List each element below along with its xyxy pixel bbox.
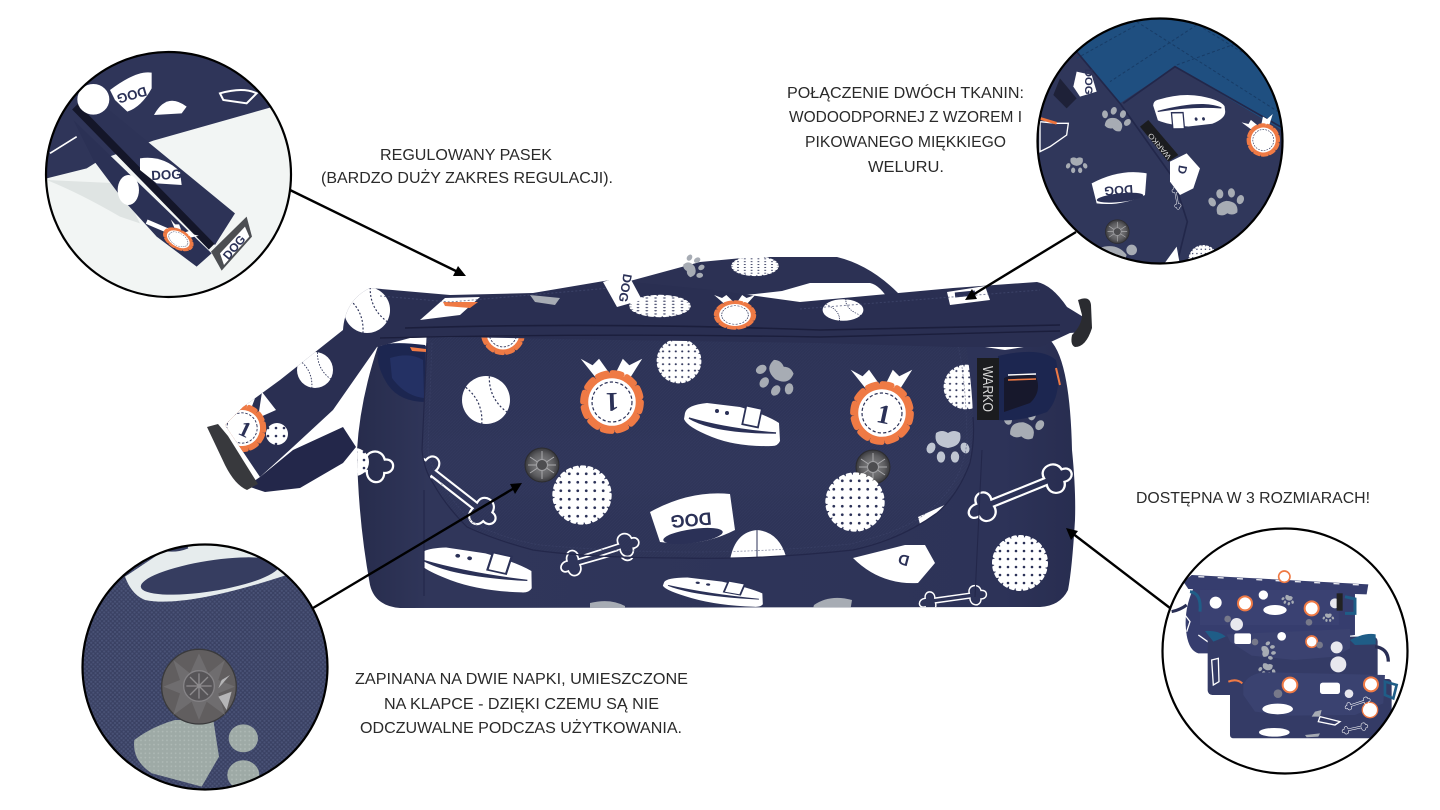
- circle detail: strap: DOG: [115, 84, 149, 106]
- arrow: two fabrics: [965, 232, 1076, 300]
- dog bowl: [650, 493, 735, 547]
- caption: fabrics: PIKOWANEGO MIĘKKIEGO: [805, 134, 1006, 151]
- main shoulder strap: [212, 280, 1085, 477]
- caption: snaps: [355, 671, 688, 737]
- flap outline: [422, 343, 974, 558]
- arrow: snaps: [313, 483, 522, 608]
- strap stitch: [380, 288, 1040, 309]
- circle outline: [82, 544, 328, 790]
- caption: strap: (BARDZO DUŻY ZAKRES REGULACJI).: [321, 169, 613, 187]
- caption: fabrics: WELURU.: [868, 159, 944, 176]
- caption: fabrics: WODOODPORNEJ Z WZOREM I: [789, 109, 1022, 126]
- roll top print right: [985, 336, 1030, 350]
- strap print: [212, 286, 1060, 455]
- dog bowl: DOG: [670, 508, 712, 532]
- flap print: 1: [874, 398, 894, 430]
- circle outline: [46, 52, 291, 297]
- flap stitching: [428, 343, 967, 552]
- small label: WARKO: [1146, 131, 1173, 161]
- medium bag: [1205, 629, 1388, 695]
- circle detail: strap: DOG: [220, 232, 248, 262]
- small dog bowl: [1092, 172, 1147, 204]
- caption: snaps: ZAPINANA NA DWIE NAPKI, UMIESZCZONE: [355, 671, 688, 688]
- circle detail: snap button: [75, 540, 335, 793]
- roll body: [357, 342, 1076, 608]
- circle detail: strap: [40, 50, 291, 297]
- lower front seams: [424, 450, 982, 597]
- strap handle loop: [615, 257, 898, 310]
- caption: fabrics: [787, 85, 1024, 176]
- arrow: adjustable strap: [290, 190, 466, 276]
- handle print: [679, 250, 778, 284]
- left strap buckle: [207, 424, 258, 490]
- caption: fabrics: POŁĄCZENIE DWÓCH TKANIN:: [787, 85, 1024, 102]
- caption: snaps: ODCZUWALNE PODCZAS UŻYTKOWANIA.: [360, 719, 682, 737]
- strap print: 1: [235, 416, 255, 443]
- product photo: rolled dog blanket with strap: [207, 250, 1092, 613]
- left roll end: [377, 343, 426, 402]
- circle detail: three sizes: [1162, 528, 1408, 774]
- right strap buckle: [1071, 298, 1092, 347]
- rear lower strap loop: [247, 427, 356, 492]
- caption: strap: [321, 147, 613, 187]
- caption: sizes: DOSTĘPNA W 3 ROZMIARACH!: [1136, 490, 1370, 507]
- circle detail: strap: DOG: [151, 167, 182, 183]
- small label: [1140, 120, 1178, 162]
- woven label: WARKO: [979, 366, 996, 412]
- roll body print: [357, 416, 1073, 608]
- large bag: [1172, 571, 1368, 653]
- strap DOG tag: DOG: [616, 273, 634, 303]
- circle detail: two fabrics: DOG: [1082, 69, 1094, 95]
- roll body print: D: [896, 550, 911, 569]
- small bag: [1228, 672, 1397, 738]
- circle outline: [1162, 528, 1408, 774]
- arrow: sizes: [1066, 528, 1170, 608]
- circle outline: [1038, 18, 1282, 264]
- small dog bowl: DOG: [1104, 182, 1133, 198]
- woven label: [977, 358, 999, 420]
- flap with print: [424, 337, 973, 558]
- strap DOG tag: [603, 273, 642, 307]
- flap print: 1: [605, 387, 620, 417]
- circle detail: two fabrics: D: [1175, 164, 1190, 175]
- flap print: [424, 338, 973, 558]
- right roll end: [998, 352, 1060, 420]
- caption: snaps: NA KLAPCE - DZIĘKI CZEMU SĄ NIE: [384, 696, 659, 713]
- circle detail: two fabrics: [1038, 15, 1293, 274]
- caption: strap: REGULOWANY PASEK: [380, 147, 553, 164]
